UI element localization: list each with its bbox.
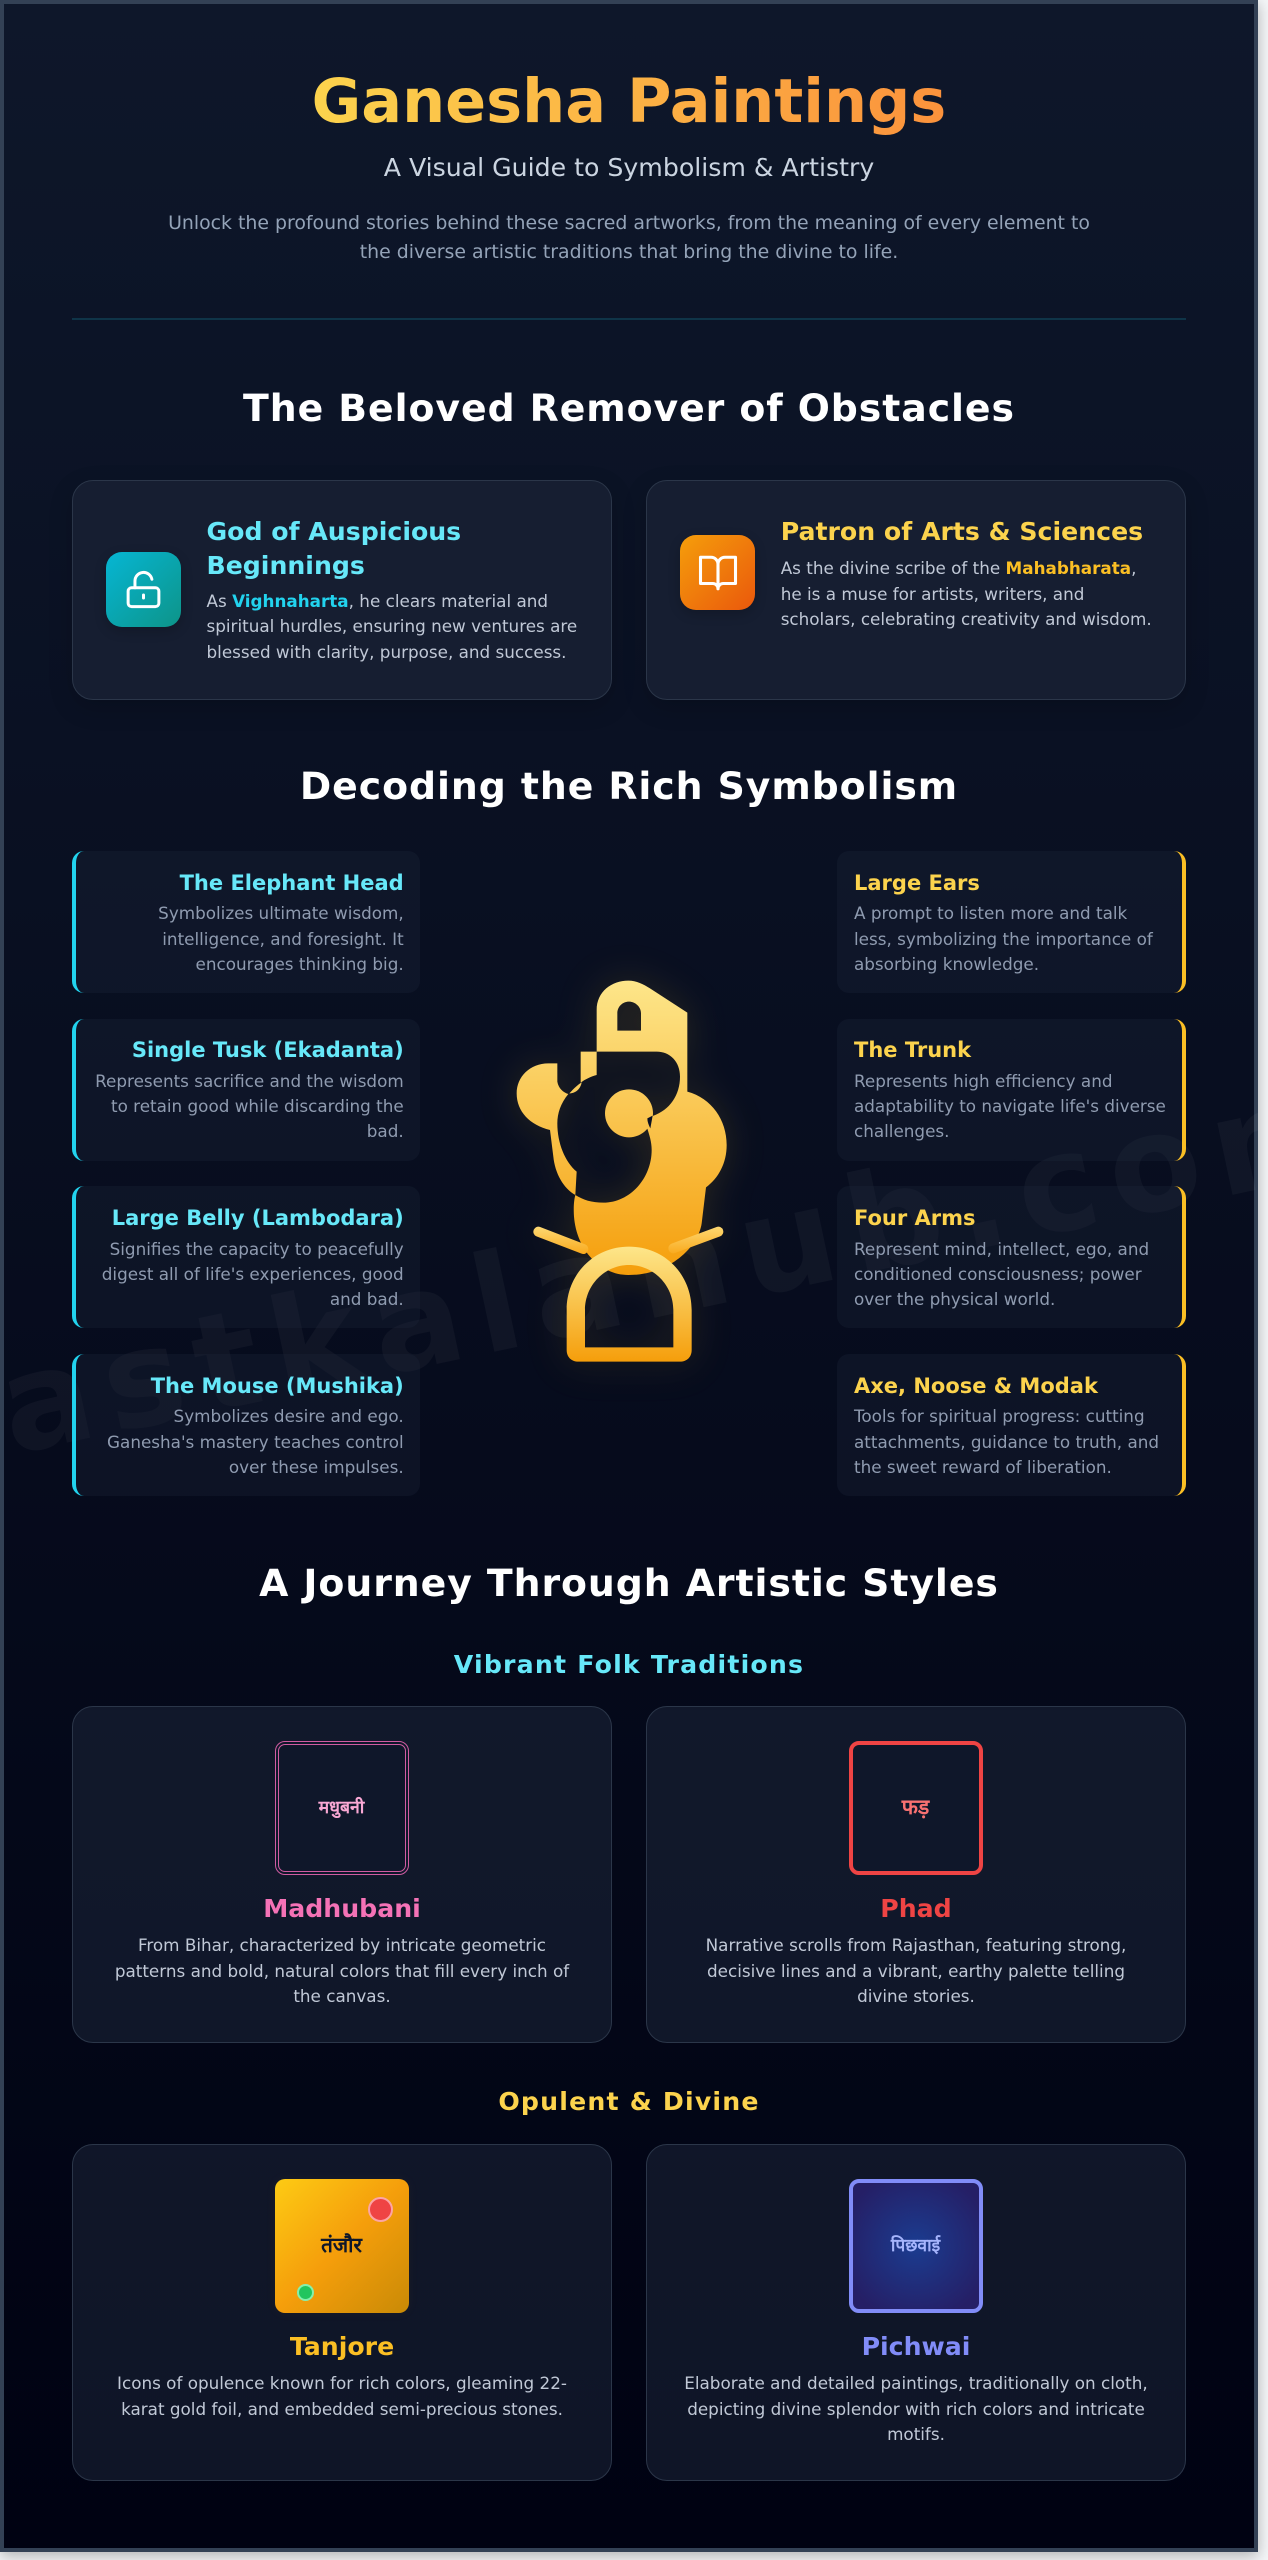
symbol text: Represents high efficiency and [854,1071,1112,1091]
card text: As Vighnaharta, he clears material and [206,591,548,611]
symbol text: over the physical world. [854,1289,1055,1309]
panel: patron of arts and sciences [646,480,1186,700]
symbol text [854,903,1154,974]
symbol text: conditioned consciousness; power [854,1264,1142,1284]
subtitle: A Visual Guide to Symbolism & Artistry [384,152,874,182]
symbol text: A prompt to listen more and talk [854,903,1127,923]
style text: Narrative scrolls from Rajasthan, featuring strong, [706,1935,1126,1955]
card text: spiritual hurdles, ensuring new ventures are [206,616,577,636]
symbol text [102,1239,404,1309]
symbol text [854,1406,1159,1477]
symbol text: Signifies the capacity to peacefully [110,1239,404,1259]
intro text: Unlock the profound stories behind these sacred artworks, from the meaning of every element to [168,212,1090,234]
symbol: single tusk [72,1019,420,1161]
icon: open lock [106,552,181,627]
style name: Tanjore [290,2332,394,2360]
intro text: the diverse artistic traditions that bring the divine to life. [360,241,898,263]
style text [117,2373,567,2418]
symbol: trunk [837,1019,1186,1161]
card text: scholars, celebrating creativity and wisdom. [781,609,1152,629]
symbol: large ears [837,851,1186,993]
symbol title: Axe, Noose & Modak [854,1374,1098,1398]
art swatch: मधुबनी [319,1798,364,1818]
symbol text: intelligence, and foresight. It [162,929,404,949]
gem: ruby [368,2197,392,2222]
style text: patterns and bold, natural colors that fill every inch of [115,1960,569,1980]
symbol text: Symbolizes desire and ego. [174,1406,404,1426]
symbol text: digest all of life's experiences, good [102,1264,404,1284]
symbol: large belly [72,1186,420,1328]
title: Ganesha Paintings [312,67,946,137]
art swatch [848,1741,982,1875]
panel: god of auspicious beginnings [72,480,612,700]
panel: tanjore [72,2144,612,2481]
style text [684,2373,1148,2444]
symbol text: less, symbolizing the importance of [854,929,1153,949]
symbol: elephant head [72,851,420,993]
style text: the canvas. [293,1986,391,2006]
card heading: God of Auspicious [206,517,461,546]
symbol text: attachments, guidance to truth, and [854,1432,1159,1452]
style text: karat gold foil, and embedded semi-precious stones. [121,2398,563,2418]
symbol text: encourages thinking big. [196,954,404,974]
style name: Pichwai [862,2332,970,2360]
card heading: Beginnings [206,551,365,580]
symbol text: adaptability to navigate life's diverse [854,1096,1166,1116]
symbol text [107,1406,404,1477]
symbol text [158,903,404,974]
symbol title: Large Belly (Lambodara) [112,1206,404,1230]
card text: As the divine scribe of the Mahabharata, [781,558,1136,578]
art swatch: पिछवाई [891,2236,940,2256]
icon: ganesha figure [510,976,736,1365]
art swatch [848,2179,982,2313]
card heading: Patron of Arts & Sciences [781,517,1143,546]
symbol title: The Trunk [854,1038,971,1062]
symbol title: Four Arms [854,1206,976,1230]
panel: pichwai [646,2144,1186,2481]
style text [706,1935,1126,2006]
subheading: opulent and divine: Opulent & Divine [498,2086,760,2116]
symbol text: Tools for spiritual progress: cutting [854,1406,1145,1426]
style text: From Bihar, characterized by intricate geometric [138,1935,546,1955]
symbol text: challenges. [854,1121,949,1141]
card text: blessed with clarity, purpose, and success. [206,642,567,662]
heading: remover of obstacles: The Beloved Remover of Obstacles [243,386,1015,430]
icon: open book [680,535,755,610]
symbol text [854,1239,1149,1309]
gem: emerald [296,2284,314,2301]
style text: decisive lines and a vibrant, earthy palette telling [707,1960,1125,1980]
symbol text: Represent mind, intellect, ego, and [854,1239,1149,1259]
symbol text [95,1071,404,1141]
style text: Icons of opulence known for rich colors, gleaming 22- [117,2373,567,2393]
art swatch [274,1741,408,1875]
symbol: mouse [72,1354,420,1496]
style text: motifs. [887,2424,945,2444]
card text [206,591,577,662]
symbol title: Large Ears [854,871,980,895]
panel: madhubani [72,1706,612,2043]
symbol text: Ganesha's mastery teaches control [107,1432,404,1452]
symbol title: Single Tusk (Ekadanta) [132,1038,404,1062]
symbol title: The Elephant Head [180,871,404,895]
panel: phad [646,1706,1186,2043]
heading: symbolism: Decoding the Rich Symbolism [300,764,958,808]
art swatch: फड़ [902,1794,929,1818]
symbol text: the sweet reward of liberation. [854,1457,1112,1477]
symbol text [854,1071,1166,1141]
art swatch [274,2179,408,2313]
symbol text: Represents sacrifice and the wisdom [95,1071,404,1091]
style text [115,1935,570,2006]
symbol text: over these impulses. [229,1457,404,1477]
style name: Madhubani [263,1894,421,1922]
style text: divine stories. [857,1986,975,2006]
intro text [168,212,1090,263]
style text: Elaborate and detailed paintings, traditionally on cloth, [684,2373,1148,2393]
art swatch: तंजौर [321,2232,362,2256]
card heading [206,517,461,580]
symbol text: to retain good while discarding the [111,1096,404,1116]
symbol: four arms [837,1186,1186,1328]
symbol: axe noose modak [837,1354,1186,1496]
symbol title: The Mouse (Mushika) [151,1374,404,1398]
style text: depicting divine splendor with rich colors and intricate [687,2398,1145,2418]
subheading: folk traditions: Vibrant Folk Traditions [454,1650,804,1678]
symbol text: absorbing knowledge. [854,954,1039,974]
symbol text: and bad. [330,1289,404,1309]
heading: artistic styles: A Journey Through Artistic Styles [259,1561,999,1605]
symbol text: Symbolizes ultimate wisdom, [158,903,404,923]
card text: he is a muse for artists, writers, and [781,584,1084,604]
card text [780,558,1152,629]
style name: Phad [880,1894,952,1922]
symbol text: bad. [367,1121,404,1141]
